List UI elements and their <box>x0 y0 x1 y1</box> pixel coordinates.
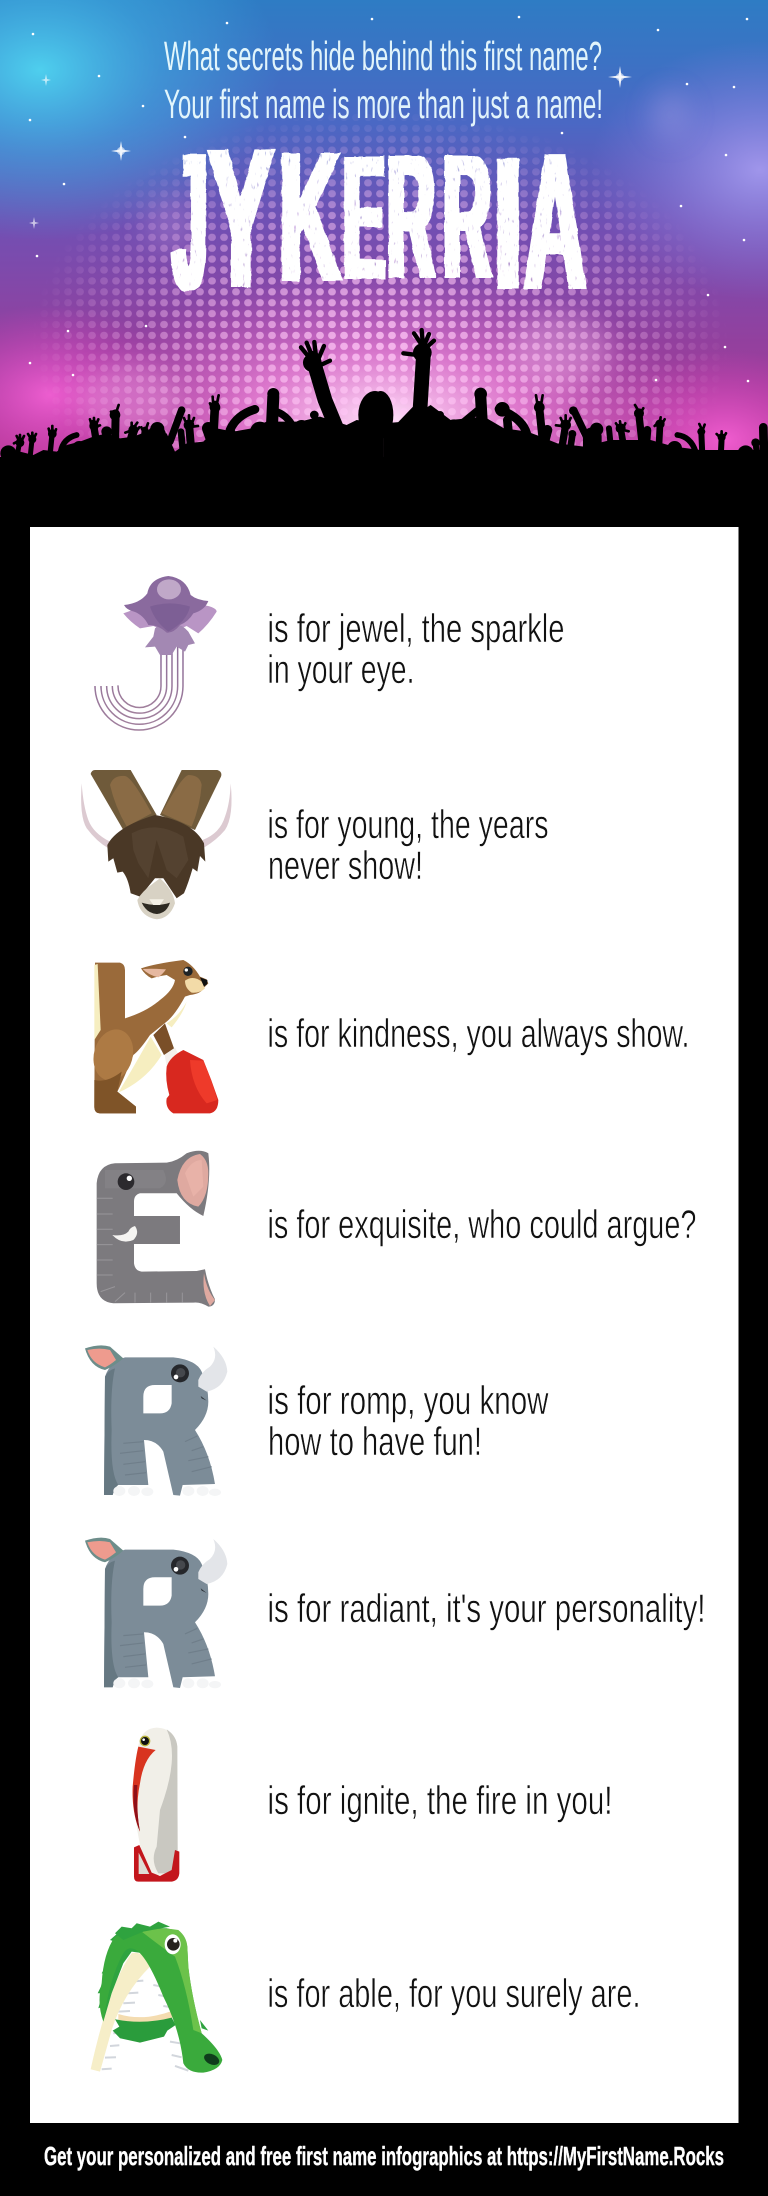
title: name: J <box>173 112 207 331</box>
text: Y line 2: never show! <box>268 844 423 888</box>
text: I: is for ignite, the fire in you! <box>268 1779 612 1823</box>
title: name: K <box>279 114 341 321</box>
crowd silhouette <box>0 330 768 530</box>
title: name: Y <box>208 107 274 330</box>
title: name: R <box>443 117 491 316</box>
icon: letter R rhino second <box>85 1538 227 1688</box>
text: Y: is for young, the years <box>268 803 548 847</box>
icon: letter I stork <box>133 1728 179 1882</box>
infographic canvas: A <box>524 112 586 331</box>
title: name: E <box>343 118 385 317</box>
icon: letter E elephant <box>97 1151 215 1307</box>
icon: letter Y yak <box>81 770 232 919</box>
intro text <box>164 33 603 127</box>
sparkles <box>29 16 749 382</box>
text: R line 2: how to have fun! <box>268 1420 482 1464</box>
text: A: is for able, for you surely are. <box>268 1972 640 2016</box>
icon: letter A crocodile <box>91 1922 222 2073</box>
text: R: is for romp, you know <box>268 1379 549 1423</box>
text: J line 2: in your eye. <box>268 648 414 692</box>
icon: letter R rhino <box>85 1345 227 1496</box>
header background <box>0 0 768 457</box>
text: J: is for jewel, the sparkle <box>268 607 564 651</box>
title: name: R <box>387 117 435 316</box>
title: name: I <box>493 118 523 330</box>
icon: letter K kangaroo <box>88 960 218 1113</box>
icon: letter J jellyfish <box>95 576 217 730</box>
white content panel <box>30 527 738 2123</box>
